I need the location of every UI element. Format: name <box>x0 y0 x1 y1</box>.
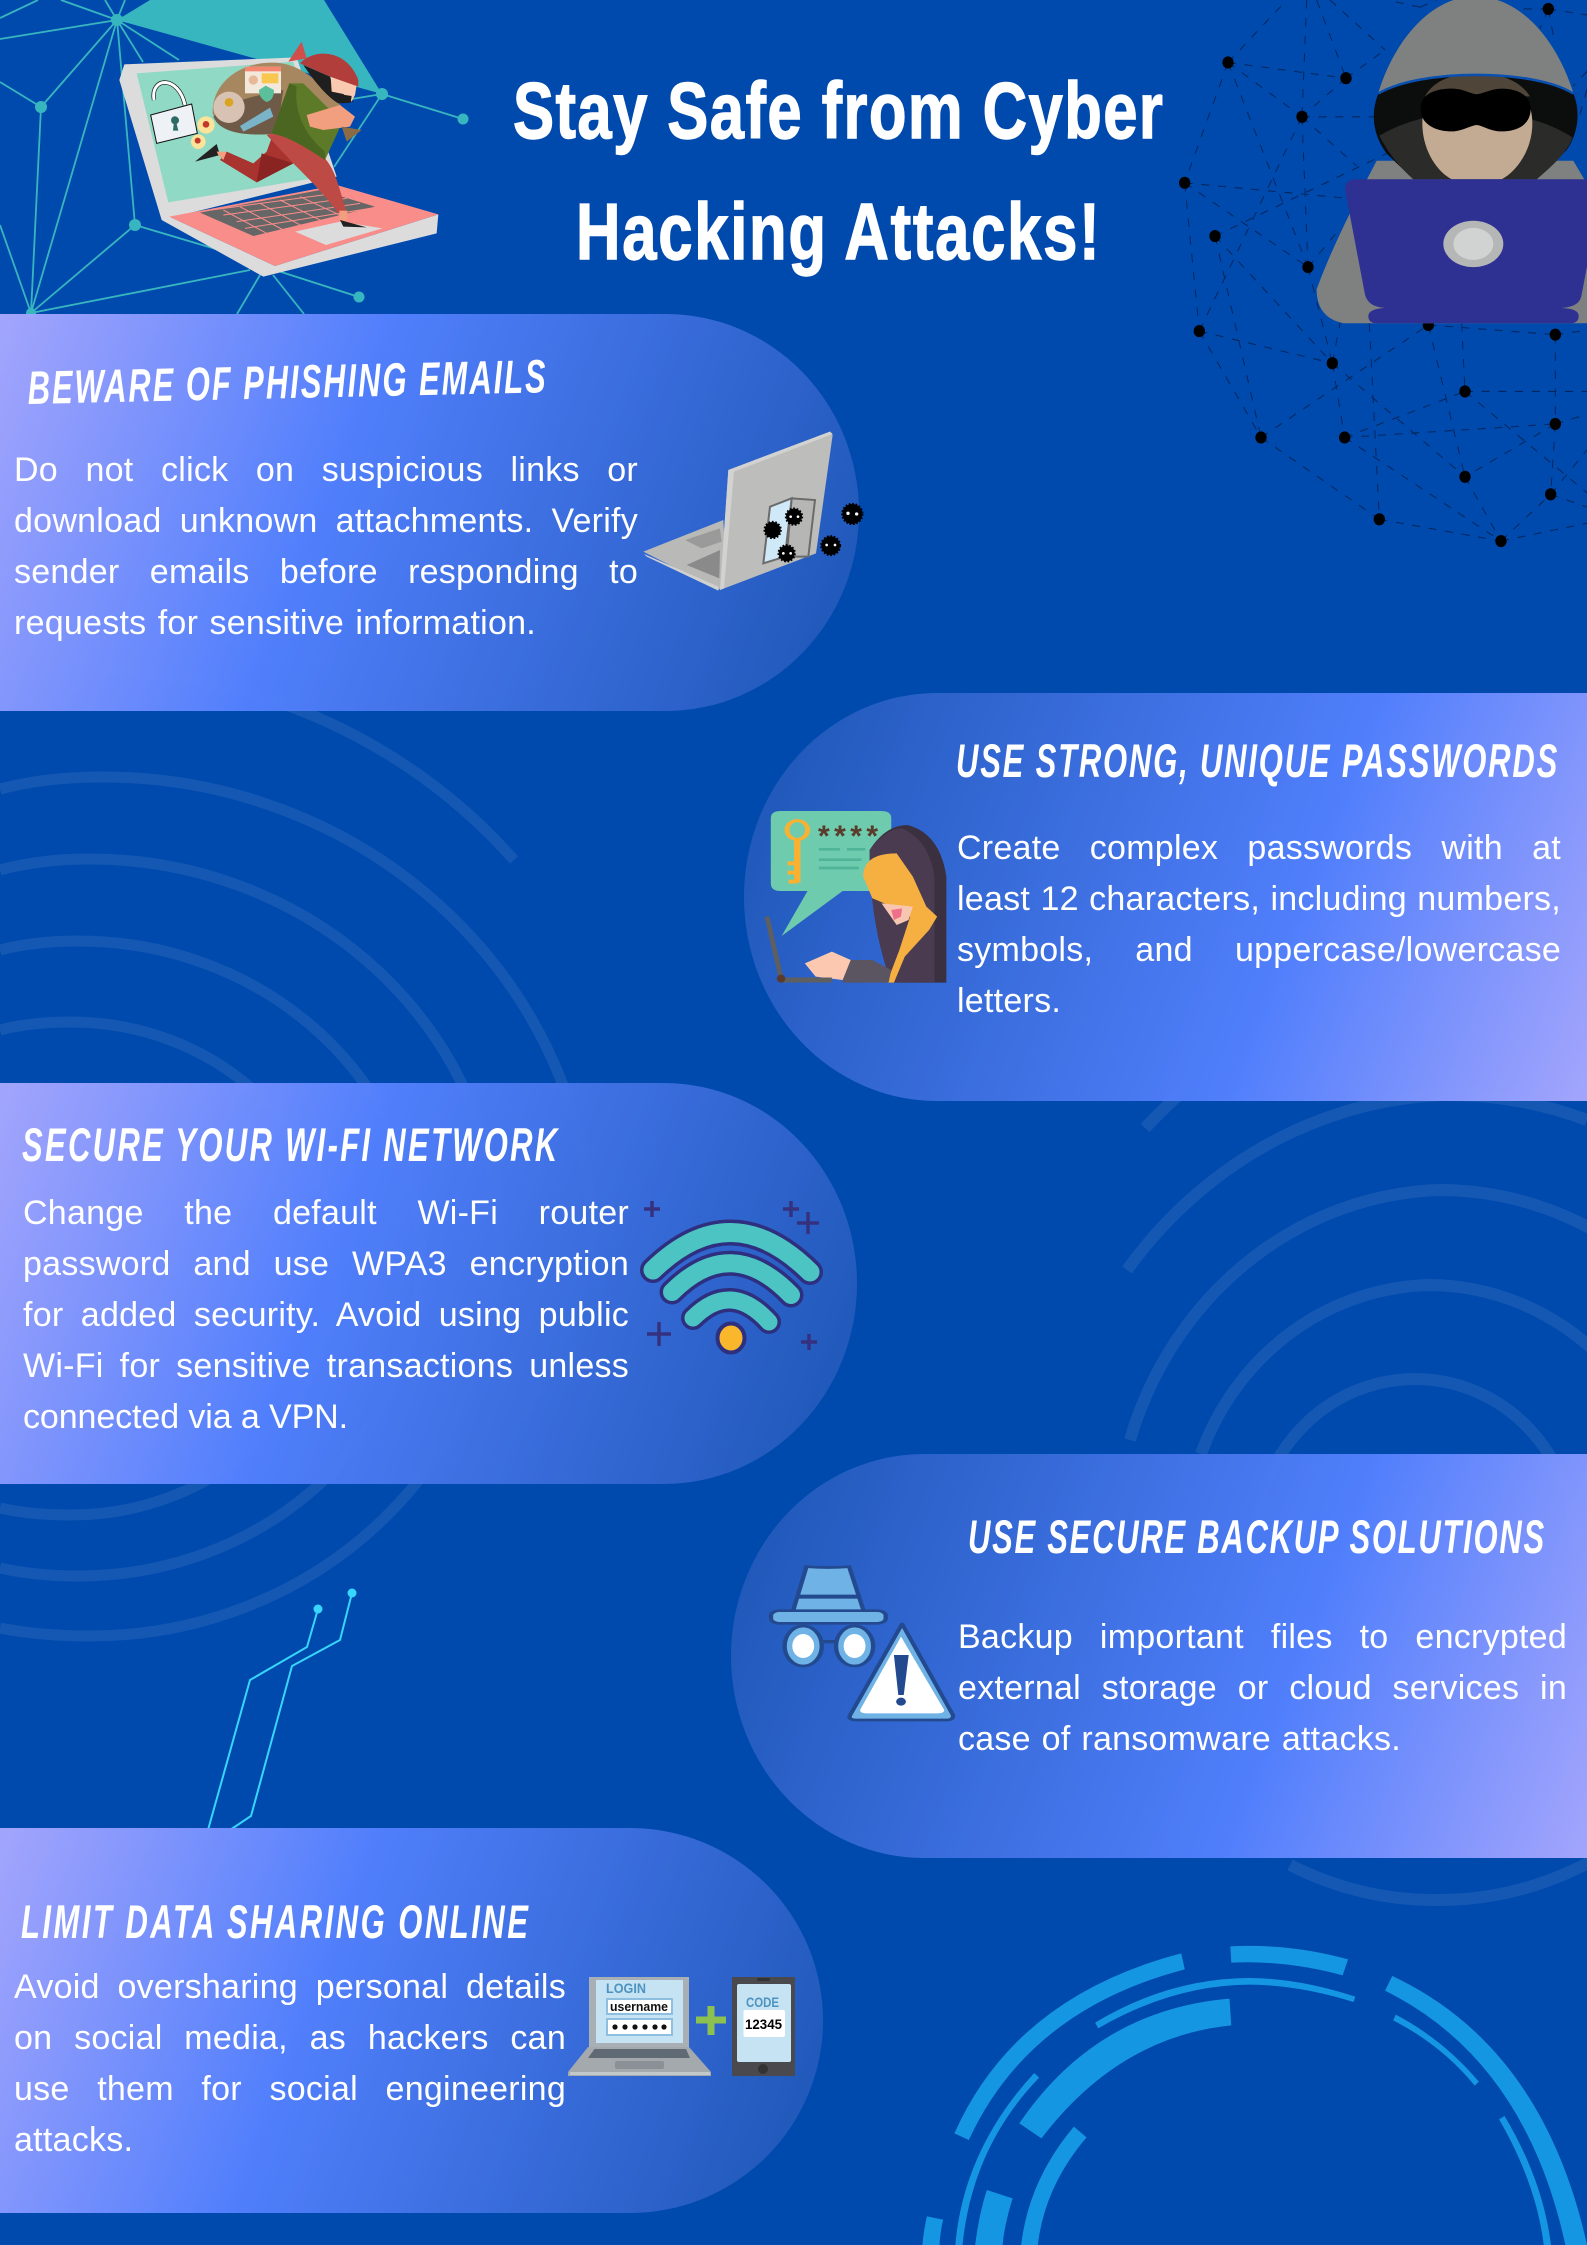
text: data sharing advice: on social media, as hackers can <box>14 2019 566 2057</box>
circuit lines <box>208 1588 356 1830</box>
title <box>513 66 1163 277</box>
password stars: **** <box>818 820 878 853</box>
teal triangle <box>117 0 382 94</box>
icon: thief running out of laptop <box>119 42 438 277</box>
icon: two-factor login laptop and phone: LOGIN <box>606 1980 646 1996</box>
panel: use strong unique passwords <box>744 693 1587 1101</box>
title: Stay Safe from Cyber <box>513 66 1163 156</box>
text: data sharing advice: use them for social engineering <box>14 2070 566 2108</box>
faint concentric arcs left <box>0 670 593 1636</box>
heading: backup: USE SECURE BACKUP SOLUTIONS <box>968 1512 1545 1564</box>
text: phishing advice: sender emails before responding to <box>14 553 638 591</box>
text: password advice <box>957 829 1561 1020</box>
text: data sharing advice <box>14 1968 566 2159</box>
text: password advice: least 12 characters, including numbers, <box>957 880 1561 918</box>
text: backup advice: Backup important files to encrypted <box>958 1618 1567 1656</box>
icon: two-factor login laptop and phone: username <box>610 1999 668 2014</box>
panel: use secure backup solutions <box>731 1454 1587 1858</box>
text: phishing advice <box>14 451 638 642</box>
text: phishing advice: requests for sensitive information. <box>14 604 536 642</box>
text: backup advice: case of ransomware attacks. <box>958 1720 1401 1758</box>
text: data sharing advice: Avoid oversharing personal details <box>14 1968 566 2006</box>
heading: phishing: BEWARE OF PHISHING EMAILS <box>27 351 547 415</box>
teal network top left <box>0 0 463 314</box>
icon: two-factor login laptop and phone: 12345 <box>745 2016 782 2032</box>
text: data sharing advice: attacks. <box>14 2121 133 2159</box>
icon: wi-fi signal <box>640 1201 823 1354</box>
text: wi-fi advice: for added security. Avoid using public <box>23 1296 629 1334</box>
panel: limit data sharing online <box>0 1828 823 2213</box>
text: password advice: symbols, and uppercase/lowercase <box>957 931 1561 969</box>
segmented ring bottom right <box>922 1946 1587 2245</box>
panel: beware of phishing emails <box>0 314 859 711</box>
icon: two-factor login laptop and phone: CODE <box>746 1994 779 2010</box>
faint concentric arcs right <box>1127 1085 1587 1900</box>
icon: hooded hacker with laptop <box>1317 0 1587 323</box>
teal network nodes <box>26 14 468 318</box>
icon: laptop with malware <box>644 432 864 591</box>
panel: secure your wi-fi network <box>0 1083 857 1484</box>
text: wi-fi advice: Change the default Wi-Fi router <box>23 1194 629 1232</box>
text: backup advice: external storage or cloud services in <box>958 1669 1567 1707</box>
text: phishing advice: Do not click on suspicious links or <box>14 451 638 489</box>
text: password advice: Create complex passwords with at <box>957 829 1561 867</box>
icon: hooded hacker with key bubble <box>764 811 946 983</box>
icon: spy hat and warning triangle <box>768 1565 956 1722</box>
text: wi-fi advice <box>23 1194 629 1436</box>
text: phishing advice: download unknown attachments. Verify <box>14 502 638 540</box>
heading: wi-fi: SECURE YOUR WI-FI NETWORK <box>22 1120 560 1172</box>
text: password advice: letters. <box>957 982 1061 1020</box>
heading: passwords: USE STRONG, UNIQUE PASSWORDS <box>956 736 1558 788</box>
text: backup advice <box>958 1618 1567 1758</box>
dashed black network top right <box>1179 0 1587 547</box>
text: wi-fi advice: password and use WPA3 encryption <box>23 1245 629 1283</box>
heading: data sharing: LIMIT DATA SHARING ONLINE <box>21 1897 529 1949</box>
text: wi-fi advice: connected via a VPN. <box>23 1398 348 1436</box>
icon: two-factor login laptop and phone <box>568 1977 795 2076</box>
text: wi-fi advice: Wi-Fi for sensitive transactions unless <box>23 1347 629 1385</box>
title: Hacking Attacks! <box>576 187 1100 277</box>
